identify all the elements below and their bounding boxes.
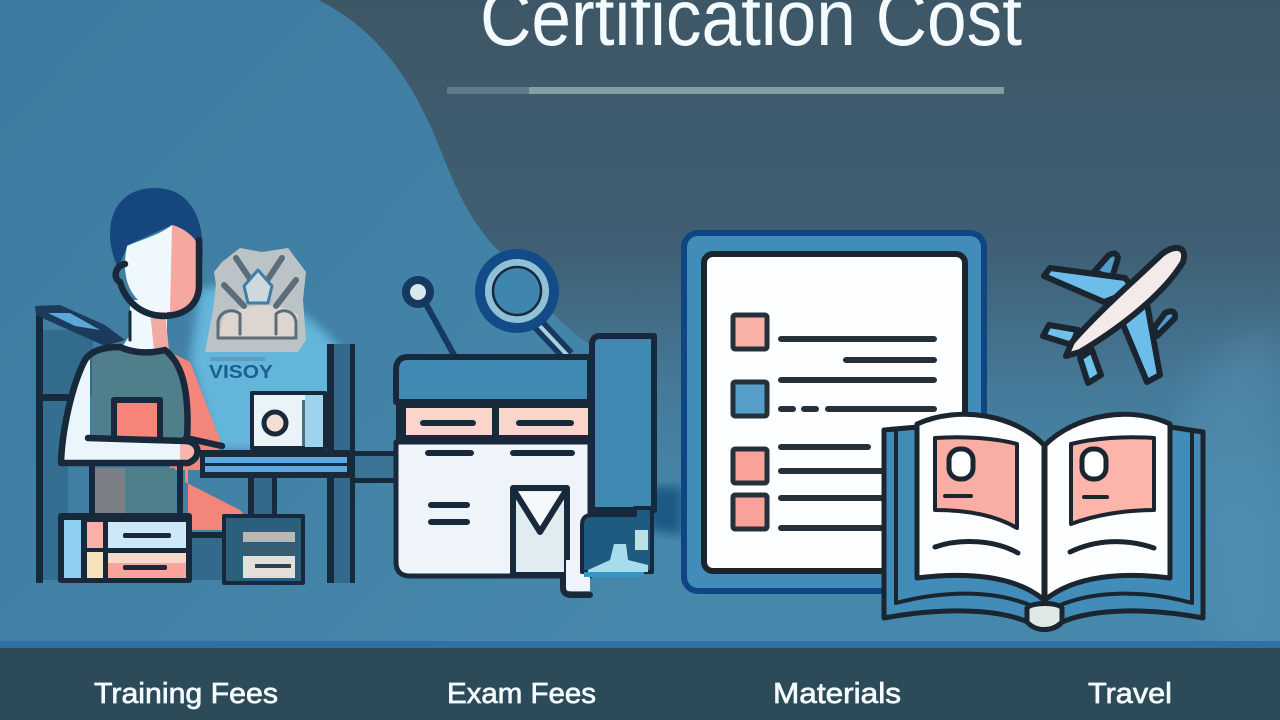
rear engines and tail: [1094, 253, 1118, 278]
checkbox 1: [733, 315, 767, 349]
dark shadow patch: [640, 487, 682, 535]
page text curves: [935, 541, 1154, 553]
garbled badge caption: [209, 357, 273, 382]
label: training fees: Training Fees: [94, 678, 278, 710]
label: exam fees: Exam Fees: [447, 678, 596, 710]
face: [125, 225, 172, 312]
garbled badge caption: VISOY: [209, 362, 273, 382]
footer band: [0, 641, 1280, 720]
checklist lines: [781, 339, 934, 528]
background blob: [0, 0, 630, 650]
title underline: [447, 87, 1004, 94]
right picture: [1071, 437, 1154, 524]
paper sheet: [704, 254, 965, 571]
label: materials: Materials: [773, 678, 901, 710]
neck: [120, 300, 167, 350]
right frame post: [327, 344, 355, 583]
label: travel: Travel: [1088, 678, 1172, 710]
fuselage: [1066, 248, 1184, 356]
hair: [110, 188, 203, 268]
illustration: exam form (exam fees): [396, 254, 682, 595]
left picture: [935, 437, 1017, 528]
illustration: person at desk (training fees): [35, 188, 395, 583]
pink back shape: [170, 352, 245, 530]
torso: [92, 349, 187, 442]
wings: [1044, 268, 1135, 302]
illustration: plane (travel): [1043, 248, 1184, 383]
book spine clasp: [1027, 604, 1062, 630]
glow behind monitor: [190, 285, 340, 450]
pin: [406, 280, 454, 355]
illustration: open book (materials): [884, 414, 1203, 630]
checkbox 2: [733, 382, 767, 416]
crest badge: [205, 248, 306, 352]
envelope: [513, 488, 567, 575]
stack of binders: [58, 513, 192, 583]
clipboard frame: [684, 233, 984, 591]
small dark device: [582, 508, 652, 577]
page block edge: [896, 432, 1192, 606]
left page: [917, 414, 1044, 600]
right glow patch: [1180, 330, 1280, 650]
monitor: [252, 393, 325, 448]
form body: [396, 357, 590, 576]
illustration: checklist (materials): [684, 233, 984, 591]
receipt tail: [563, 560, 590, 595]
desk: [190, 450, 355, 580]
side panel: [592, 336, 654, 510]
connector to form: [355, 451, 395, 483]
pink pocket: [114, 400, 160, 440]
box with papers: [224, 516, 303, 583]
checkbox 4: [733, 495, 767, 529]
magnifier: [480, 254, 568, 356]
arm: [62, 358, 198, 462]
checkbox 3: [733, 449, 767, 483]
book cover: [884, 427, 1203, 630]
lower body: [92, 468, 130, 513]
frame left post and lamp: [35, 305, 125, 583]
right page: [1045, 414, 1170, 600]
